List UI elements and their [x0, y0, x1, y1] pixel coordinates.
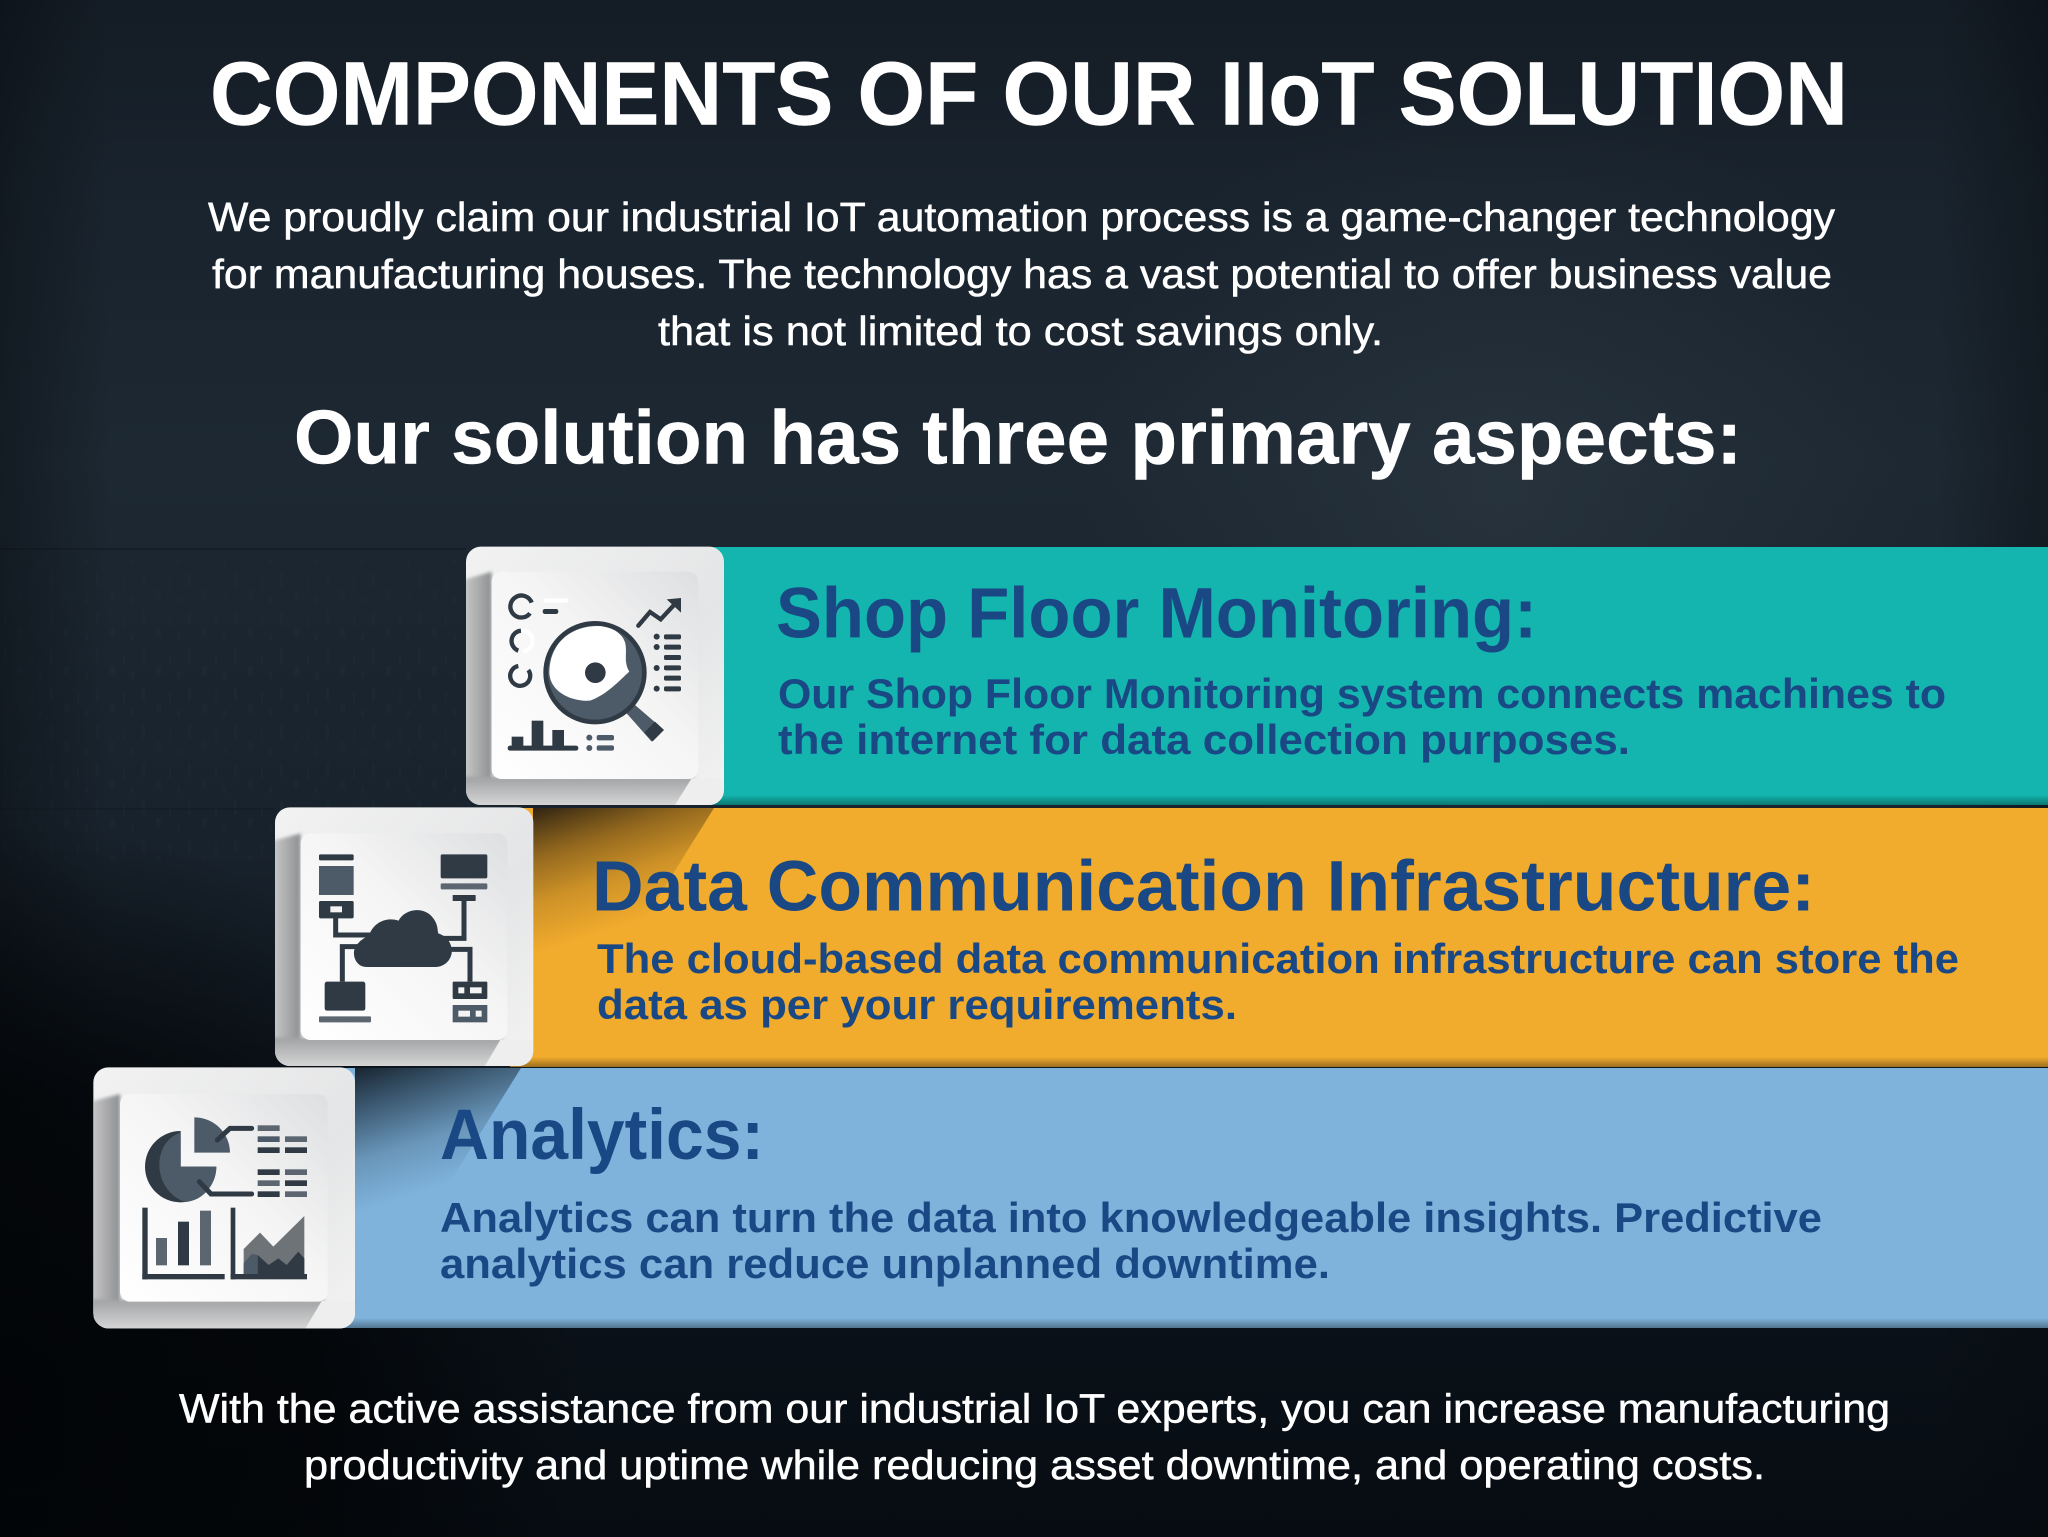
icon: connectors: [336, 900, 470, 982]
text: analytics description: [440, 1194, 1822, 1287]
panel: shop floor monitoring band: [700, 547, 2048, 805]
text: data communication description: The cloud-based data communication infrastructure can store the: [597, 935, 1959, 982]
icon: gauges: [510, 596, 533, 686]
icon: trend arrow: [638, 598, 681, 626]
icon card: cloud network: [272, 807, 533, 1071]
closing text: productivity and uptime while reducing asset downtime, and operating costs.: [304, 1442, 1765, 1488]
intro paragraph: [208, 194, 1836, 354]
text: shop floor description: the internet for data collection purposes.: [778, 716, 1630, 763]
icon: area chart: [231, 1208, 307, 1279]
icon: list: [654, 634, 681, 692]
icon: server: [453, 982, 487, 1022]
heading: data communication: Data Communication Infrastructure:: [592, 848, 1815, 926]
subheading: Our solution has three primary aspects:: [294, 396, 1742, 480]
panel: data communication band: [510, 808, 2048, 1067]
icon: bar chart: [142, 1208, 225, 1279]
title: COMPONENTS OF OUR IIoT SOLUTION: [210, 44, 1848, 144]
icon: mini legend: [586, 735, 614, 751]
heading: shop floor monitoring: Shop Floor Monitoring:: [776, 574, 1537, 654]
icon: data table: [258, 1125, 307, 1197]
intro paragraph: We proudly claim our industrial IoT automation process is a game-changer technology: [208, 194, 1836, 240]
icon: magnifier with eye: [546, 623, 664, 742]
icon: top-right monitor: [441, 854, 487, 901]
icon card: monitoring: [463, 547, 724, 810]
icon: laptop: [319, 982, 371, 1022]
heading: analytics: Analytics:: [440, 1096, 764, 1175]
icon card: analytics: [91, 1067, 355, 1333]
text: shop floor description: [778, 670, 1946, 763]
text: analytics description: analytics can reduce unplanned downtime.: [440, 1240, 1330, 1287]
intro paragraph: for manufacturing houses. The technology has a vast potential to offer business value: [212, 251, 1832, 297]
text: shop floor description: Our Shop Floor Monitoring system connects machines to: [778, 670, 1946, 717]
panel: analytics band: [330, 1068, 2048, 1328]
text: data communication description: data as per your requirements.: [597, 981, 1237, 1028]
icon: top-left device: [319, 854, 354, 918]
icon: cloud: [354, 910, 452, 967]
icon: pie chart: [145, 1117, 252, 1202]
intro paragraph: that is not limited to cost savings only.: [658, 308, 1383, 354]
text: analytics description: Analytics can turn the data into knowledgeable insights. Predictive: [440, 1194, 1822, 1241]
shadow cast by upper card: [533, 808, 714, 1010]
closing text: With the active assistance from our industrial IoT experts, you can increase manufacturing: [179, 1386, 1890, 1432]
closing text: [179, 1386, 1890, 1488]
text: data communication description: [597, 935, 1959, 1028]
icon: mini bar chart: [508, 721, 578, 751]
shadow cast by middle card: [355, 1068, 521, 1270]
